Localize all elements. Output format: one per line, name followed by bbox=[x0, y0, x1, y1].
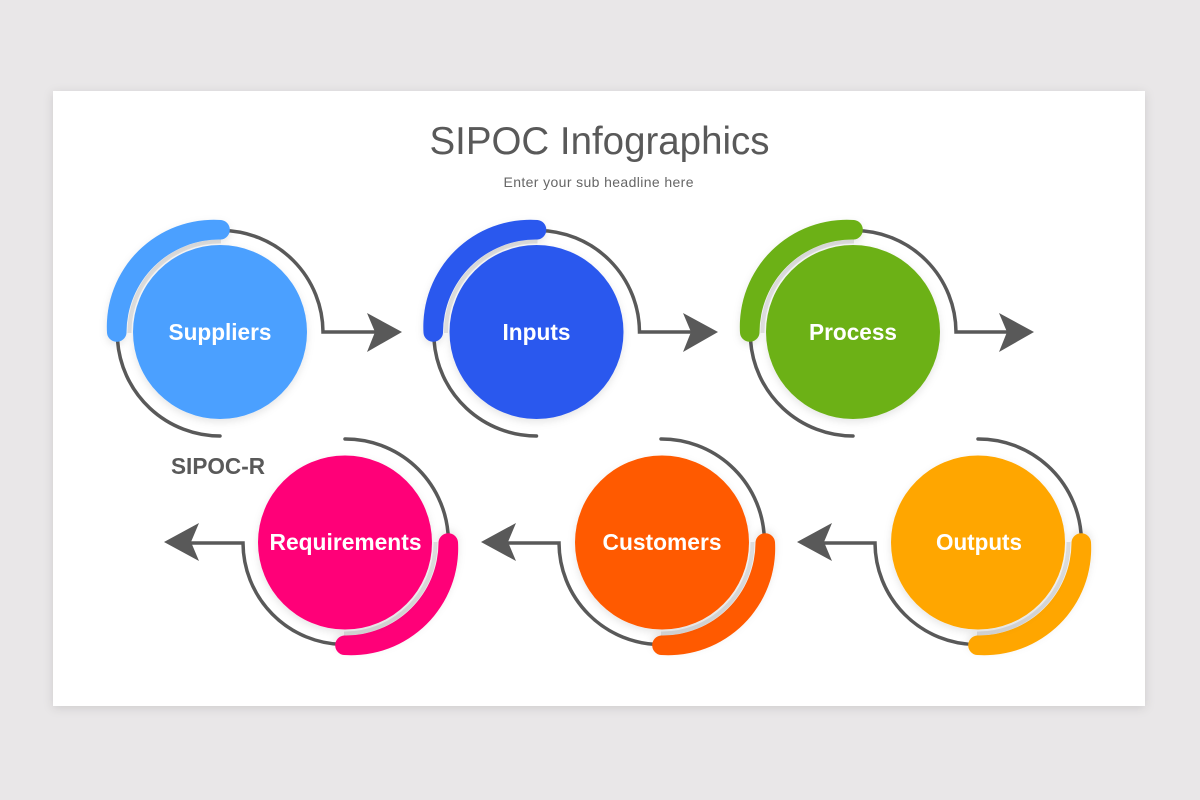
panel: white slide card bbox=[53, 91, 1145, 706]
step: Requirements: Requirements bbox=[270, 529, 422, 555]
step: Customers bbox=[481, 439, 775, 655]
arrow: Outputs to Customers bbox=[797, 523, 832, 561]
step: Suppliers: Suppliers bbox=[168, 319, 272, 345]
arrow: Requirements onward bbox=[164, 523, 199, 561]
arrow: Customers to Requirements bbox=[481, 523, 516, 561]
SIPOC-R label: SIPOC-R bbox=[171, 453, 265, 479]
arrow: Suppliers to Inputs bbox=[367, 313, 402, 352]
step: Outputs bbox=[797, 439, 1091, 655]
step: Process: Process bbox=[809, 319, 897, 345]
title: SIPOC Infographics bbox=[430, 120, 770, 163]
step: Inputs: Inputs bbox=[502, 319, 570, 345]
step: Suppliers bbox=[107, 220, 402, 436]
step: Process bbox=[740, 220, 1034, 436]
arrow: Inputs to Process bbox=[683, 313, 718, 352]
step: Requirements bbox=[164, 439, 458, 655]
step: Outputs: Outputs bbox=[936, 529, 1022, 555]
arrow: Process onward bbox=[999, 313, 1034, 352]
step: Inputs bbox=[423, 220, 718, 436]
subtitle: Enter your sub headline here bbox=[504, 174, 694, 190]
step: Customers: Customers bbox=[602, 529, 722, 555]
